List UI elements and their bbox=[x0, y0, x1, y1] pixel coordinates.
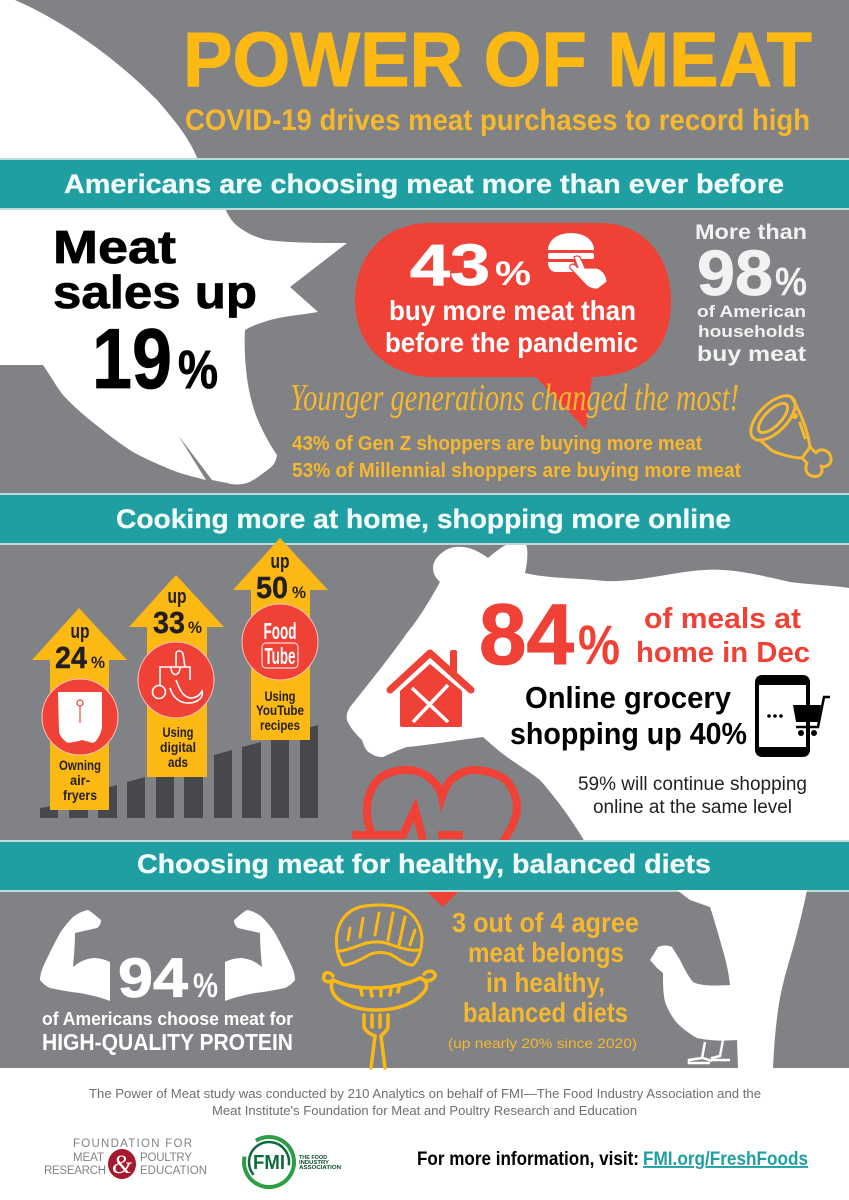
section band 3 bbox=[0, 840, 849, 892]
arrow: air fryers up 24% bbox=[32, 608, 127, 810]
bubble stat 43%: 43 bbox=[410, 233, 490, 298]
stat 94% protein: of Americans choose meat for bbox=[42, 1009, 293, 1029]
healthy diets stat: balanced diets bbox=[463, 997, 628, 1028]
stat 94% protein: % bbox=[193, 967, 218, 1005]
logo: Foundation for Meat and Poultry Research and Education: MEAT bbox=[73, 1152, 104, 1164]
generation stats: 43% of Gen Z shoppers are buying more meat bbox=[292, 433, 702, 455]
healthy diets stat: in healthy, bbox=[486, 967, 605, 998]
arrow: YouTube recipes up 50%: up bbox=[270, 551, 290, 573]
bubble stat 43%: % bbox=[495, 255, 531, 293]
icon: ham leg bbox=[743, 388, 831, 476]
meat sales stat: % bbox=[178, 340, 218, 400]
icon: sausage and fork bbox=[324, 971, 435, 1068]
red speech bubble bbox=[355, 223, 671, 430]
online grocery stat: Online grocery bbox=[525, 680, 732, 715]
subtitle: COVID-19 drives meat purchases to record high bbox=[185, 104, 810, 137]
stat 94% protein bbox=[42, 946, 293, 1055]
cow leg and chicken silhouette bbox=[650, 890, 807, 1068]
heart with pulse line icon bbox=[352, 770, 517, 842]
section band 2 bbox=[0, 493, 849, 545]
arrow: YouTube recipes up 50%: recipes bbox=[260, 717, 300, 733]
arrow: air fryers up 24%: fryers bbox=[63, 787, 97, 803]
icon: flexed arms bbox=[40, 910, 295, 1001]
household stat 98%: More than bbox=[695, 221, 807, 244]
logo: Foundation for Meat and Poultry Research and Education: POULTRY bbox=[140, 1152, 192, 1164]
online grocery stat bbox=[510, 680, 747, 751]
online shopping note bbox=[578, 774, 807, 818]
icon: air fryer in red circle bbox=[42, 679, 118, 755]
cow silhouette bbox=[347, 540, 849, 842]
arrow: digital ads up 33%: digital bbox=[160, 739, 196, 755]
healthy diets stat: 3 out of 4 agree bbox=[452, 907, 639, 938]
more information link: FMI.org/FreshFoods bbox=[643, 1149, 808, 1170]
title: POWER OF MEAT bbox=[183, 17, 812, 103]
logo: FMI bbox=[235, 1128, 341, 1196]
icon: burger and pointing hand bbox=[548, 233, 607, 289]
more information link bbox=[417, 1149, 808, 1170]
meat sales stat bbox=[53, 221, 257, 407]
section band 1 bbox=[0, 158, 849, 210]
icon: steak bbox=[336, 905, 422, 965]
icon: phone with cart bbox=[755, 675, 830, 757]
arrow: digital ads up 33%: ads bbox=[168, 754, 188, 770]
online shopping note: 59% will continue shopping bbox=[578, 774, 807, 795]
stat 84% of meals at home bbox=[479, 587, 810, 683]
household stat 98%: of American bbox=[697, 302, 806, 321]
logo: Foundation for Meat and Poultry Research and Education: RESEARCH bbox=[44, 1165, 106, 1177]
stat 94% protein: 94 bbox=[118, 946, 188, 1009]
online grocery stat: shopping up 40% bbox=[510, 716, 747, 751]
household stat 98% bbox=[695, 221, 807, 366]
logo: Foundation for Meat and Poultry Research and Education: EDUCATION bbox=[140, 1165, 207, 1177]
generation stats bbox=[292, 433, 741, 482]
arrow: digital ads up 33%: % bbox=[188, 618, 202, 637]
arrow: air fryers up 24%: 24 bbox=[55, 640, 88, 675]
arrow: air fryers up 24%: % bbox=[91, 653, 105, 672]
icon: Food Tube in red circle: Tube bbox=[264, 643, 296, 669]
arrow: air fryers up 24%: air- bbox=[70, 772, 90, 788]
logo: FMI: INDUSTRY bbox=[299, 1160, 329, 1166]
household stat 98%: households bbox=[698, 322, 805, 341]
stat 84% of meals at home: home in Dec bbox=[636, 637, 810, 669]
arrow: YouTube recipes up 50%: % bbox=[292, 583, 306, 602]
logo: FMI: FMI bbox=[253, 1152, 285, 1174]
arrow: air fryers up 24%: Owning bbox=[59, 757, 101, 773]
band 1 heading: Americans are choosing meat more than ever before bbox=[64, 169, 784, 199]
healthy diets stat: meat belongs bbox=[468, 937, 624, 968]
bubble stat 43%: buy more meat than bbox=[389, 295, 636, 326]
logo: Foundation for Meat and Poultry Research and Education: FOUNDATION FOR bbox=[73, 1138, 192, 1150]
pig silhouette middle bbox=[0, 208, 347, 484]
stat 84% of meals at home: % bbox=[578, 613, 620, 676]
stat 94% protein: HIGH-QUALITY PROTEIN bbox=[42, 1029, 293, 1055]
study credit: The Power of Meat study was conducted by 210 Analytics on behalf of FMI—The Food Industry Association and the bbox=[89, 1086, 761, 1101]
arrow: digital ads up 33%: 33 bbox=[153, 605, 185, 640]
logo: Foundation for Meat and Poultry Research and Education: & bbox=[112, 1150, 133, 1179]
arrow: digital ads up 33%: up bbox=[168, 586, 186, 608]
household stat 98%: 98 bbox=[697, 237, 773, 309]
icon: Food Tube in red circle bbox=[242, 604, 318, 680]
study credit: Meat Institute's Foundation for Meat and Poultry Research and Education bbox=[212, 1103, 637, 1118]
logo: FMI: THE FOOD bbox=[299, 1155, 327, 1161]
logo: FMI: ASSOCIATION bbox=[299, 1165, 341, 1171]
meat sales stat: Meat bbox=[53, 221, 176, 273]
household stat 98%: buy meat bbox=[697, 343, 806, 366]
logo: Foundation for Meat and Poultry Research and Education bbox=[44, 1138, 207, 1179]
band 3 heading: Choosing meat for healthy, balanced diets bbox=[137, 849, 711, 879]
pig silhouette top bbox=[0, 0, 198, 160]
footer background bbox=[0, 1068, 849, 1200]
healthy diets stat bbox=[448, 907, 639, 1051]
bubble stat 43%: before the pandemic bbox=[385, 327, 638, 358]
icon: house with fork and knife bbox=[390, 650, 471, 727]
generation stats: 53% of Millennial shoppers are buying more meat bbox=[292, 460, 741, 482]
band 2 heading: Cooking more at home, shopping more online bbox=[116, 504, 731, 534]
meat sales stat: sales up bbox=[53, 266, 257, 318]
arrow: YouTube recipes up 50%: YouTube bbox=[256, 702, 304, 718]
healthy diets stat: (up nearly 20% since 2020) bbox=[448, 1035, 637, 1051]
meat sales stat: 19 bbox=[92, 312, 172, 407]
arrow: digital ads up 33% bbox=[129, 575, 224, 777]
arrow: air fryers up 24%: up bbox=[70, 621, 90, 643]
more information link: For more information, visit: bbox=[417, 1149, 639, 1170]
arrow: YouTube recipes up 50%: 50 bbox=[256, 570, 288, 605]
bubble stat 43% bbox=[385, 233, 638, 358]
bar chart background bbox=[40, 725, 318, 818]
heart tip below band bbox=[427, 892, 458, 907]
stat 84% of meals at home: of meals at bbox=[644, 603, 801, 635]
online shopping note: online at the same level bbox=[593, 797, 792, 818]
stat 84% of meals at home: 84 bbox=[479, 587, 574, 683]
arrow: YouTube recipes up 50%: Using bbox=[264, 688, 296, 704]
icon: grocery bag in red circle bbox=[138, 642, 214, 718]
icon: Food Tube in red circle: Food bbox=[264, 618, 296, 644]
arrow: digital ads up 33%: Using bbox=[162, 724, 194, 740]
household stat 98%: % bbox=[775, 260, 807, 304]
arrow: YouTube recipes up 50% bbox=[233, 538, 328, 740]
study credit bbox=[89, 1086, 761, 1118]
